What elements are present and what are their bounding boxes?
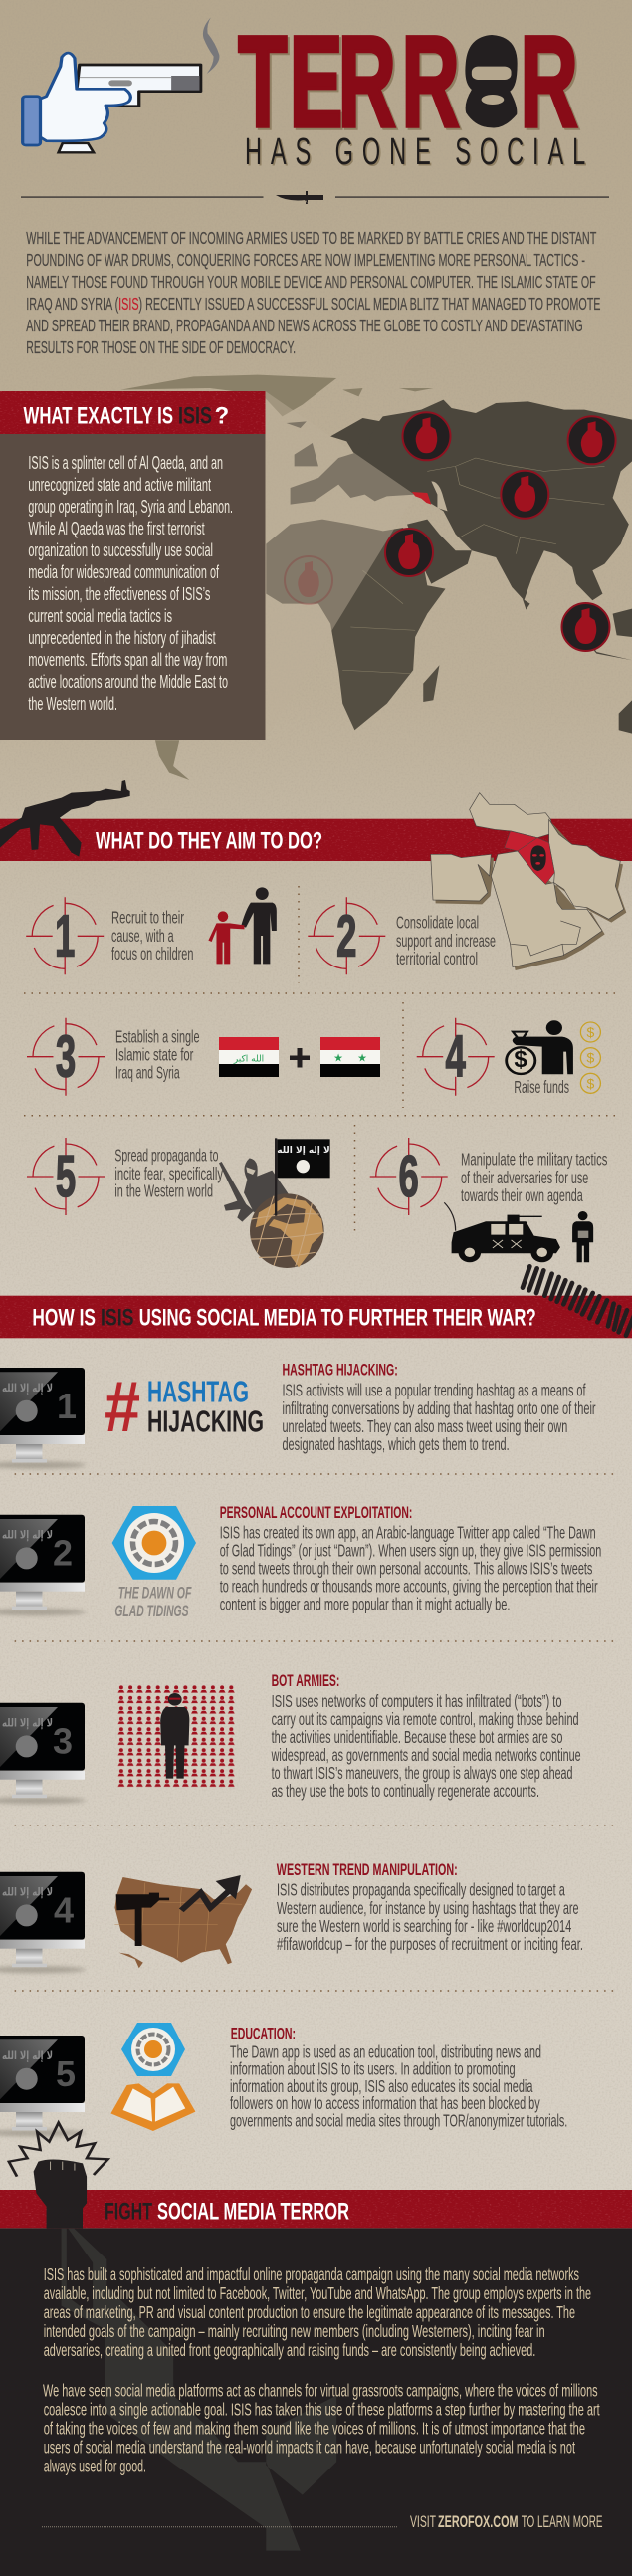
banner: SOCIAL MEDIA TERROR: [157, 2198, 349, 2225]
map: Middle East with Iraq and Syria highlighted: [431, 793, 626, 970]
body text: active locations around the Middle East to: [28, 672, 228, 692]
section: personal account exploitation: [220, 1504, 601, 1614]
coins: $: [587, 1075, 595, 1091]
text: Consolidate local: [396, 913, 479, 933]
grenade markers: [285, 412, 616, 651]
target number 6: [370, 1138, 448, 1215]
aim 3: establish state: [27, 1018, 380, 1096]
dotted divider: [15, 1640, 615, 1642]
target number 1: [26, 897, 104, 974]
ISIS territory marker: [412, 492, 431, 505]
text: [114, 1146, 223, 1201]
text: Recruit to their: [111, 908, 184, 928]
title: TERROR: TERRR: [238, 9, 578, 155]
body text: media for widespread communication of: [28, 562, 220, 582]
monitor 3: [0, 1703, 86, 1804]
heading bar: [0, 391, 265, 434]
section: western trend manipulation: WESTERN TREND MANIPULATION:: [277, 1861, 458, 1879]
target number 5: [27, 1138, 105, 1215]
target number 2: 2: [336, 905, 356, 969]
text: [115, 1027, 199, 1083]
dotted divider: [15, 1825, 615, 1826]
coins: $: [587, 1024, 595, 1040]
icon: Dawn app and open book: [110, 2023, 195, 2131]
banner: what do they aim to do: WHAT DO THEY AIM TO DO?: [96, 828, 322, 855]
flag: Syria: ★: [333, 1051, 343, 1065]
section: bot armies: [271, 1672, 581, 1801]
monitor 1: [0, 1368, 86, 1469]
footer call to action: [42, 2512, 603, 2531]
plus sign: [290, 1048, 310, 1067]
icon: armored vehicle and man: [444, 1202, 593, 1262]
text: Establish a single: [115, 1027, 199, 1047]
title: TERROR: TERRR: [240, 11, 580, 157]
text: support and increase: [396, 931, 496, 951]
header: title with gun hand: [23, 9, 587, 174]
flag: Syria: ★: [357, 1051, 367, 1065]
monitor 3: لا إله إلا الله: [2, 1717, 53, 1730]
body text: current social media tactics is: [28, 606, 172, 626]
body text: group operating in Iraq, Syria and Lebanon.: [28, 497, 233, 517]
caption: THE DAWN OF: [118, 1584, 192, 1603]
vertical dotted divider: [402, 1002, 404, 1108]
aim 2: consolidate: [308, 897, 496, 974]
icon: hashtag hijacking logo: [105, 1367, 264, 1447]
divider with knife: [21, 191, 609, 204]
flag: Iraq: [219, 1037, 279, 1077]
icon: raised fist with burst: [9, 2123, 108, 2228]
horizontal dotted divider: [24, 1115, 621, 1117]
heading bar: ?: [215, 403, 229, 430]
aim 4: raise funds: [417, 1018, 600, 1097]
text: [111, 908, 193, 964]
body text: movements. Efforts span all the way from: [28, 650, 227, 670]
target number 5: 5: [56, 1145, 76, 1209]
subtitle: HAS GONE SOCIAL: HAS GONE SOCIAL: [247, 131, 587, 174]
icon: fighter with flag on globe: [219, 1138, 330, 1268]
icon: smoke: [203, 17, 219, 74]
target number 2: [308, 897, 385, 974]
icon: man with money bag: [507, 1020, 573, 1074]
text: [461, 1150, 608, 1205]
vertical dotted divider: [354, 1125, 356, 1231]
text: focus on children: [111, 944, 193, 964]
banner: FIGHT: [105, 2198, 152, 2225]
monitor 1: 1: [57, 1386, 77, 1426]
text: Spread propaganda to: [114, 1146, 218, 1166]
monitor 5: 5: [56, 2053, 76, 2094]
section: hashtag hijacking: [283, 1362, 596, 1454]
target number 3: 3: [56, 1025, 76, 1090]
coins: $: [587, 1050, 595, 1066]
banner: how is ISIS using social media: ISIS: [101, 1305, 133, 1332]
flag: Syria: [320, 1037, 380, 1077]
monitor 3: 3: [53, 1721, 73, 1762]
monitor 2: لا إله إلا الله: [2, 1529, 53, 1542]
monitor 1: لا إله إلا الله: [2, 1382, 53, 1395]
section: education: [230, 2025, 567, 2130]
body text: the Western world.: [28, 694, 117, 714]
section: western trend manipulation: [277, 1861, 583, 1954]
aim 5: propaganda: [27, 1138, 330, 1268]
text: Raise funds: [514, 1077, 569, 1097]
aim 1: recruit: [26, 887, 277, 974]
dotted divider: [15, 1473, 615, 1475]
target number 3: [27, 1018, 105, 1096]
icon: like-hand pistol: [23, 53, 201, 152]
grenade marker: Arabia: [385, 529, 433, 576]
footer call to action: ZEROFOX.COM: [438, 2512, 518, 2531]
monitor 2: [0, 1515, 86, 1615]
target number 4: 4: [446, 1025, 466, 1090]
section: personal account exploitation: PERSONAL ACCOUNT EXPLOITATION:: [220, 1504, 412, 1522]
body text: ISIS is a splinter cell of Al Qaeda, and an: [28, 453, 223, 473]
icon: balaclava mask as letter O: [465, 35, 518, 127]
paragraph 1: [44, 2264, 591, 2360]
panel: what exactly is ISIS: [0, 391, 265, 740]
watermark: fox logo: [62, 2217, 336, 2551]
footer call to action: VISIT: [410, 2512, 436, 2531]
icon: US map with gun and trend arrow: [114, 1875, 252, 1968]
flag: Iraq: الله اكبر: [233, 1055, 264, 1065]
paragraph 2: always used for good.: [44, 2457, 146, 2476]
ammunition belt: [523, 1266, 632, 1336]
coins: [580, 1022, 600, 1093]
text: [396, 913, 496, 968]
target number 6: 6: [399, 1145, 419, 1209]
panel: fight social media terror: [0, 2123, 632, 2576]
banner: [0, 2190, 632, 2228]
monitor 5: [0, 2036, 86, 2136]
icon: adult and child: [208, 887, 277, 964]
icon: fighter with flag on globe: لا إله إلا الله: [277, 1146, 330, 1156]
aim 6: manipulate tactics: [370, 1138, 608, 1262]
text: incite fear, specifically: [114, 1164, 223, 1183]
banner: how is ISIS using social media: HOW IS: [32, 1305, 96, 1332]
grenade marker: West Africa faint: [285, 556, 332, 604]
body text: its mission, the effectiveness of ISIS’s: [28, 584, 210, 604]
text: in the Western world: [114, 1181, 213, 1201]
grenade marker: East Asia: [568, 416, 616, 464]
icon: bot army crowd with masked man: [117, 1685, 236, 1790]
body text: unrecognized state and active militant: [28, 475, 211, 495]
icon: AK-47 rifle: [0, 780, 130, 857]
monitor 4: 4: [54, 1890, 74, 1931]
monitor 4: [0, 1872, 86, 1973]
section: hashtag hijacking: HASHTAG HIJACKING:: [283, 1362, 398, 1380]
paragraph 2: [43, 2380, 600, 2476]
intro text: RESULTS FOR THOSE ON THE SIDE OF DEMOCRACY.: [26, 337, 296, 357]
icon: Dawn of Glad Tidings app: [112, 1506, 196, 1620]
banner: how is ISIS using social media: [0, 1296, 632, 1338]
body text: While Al Qaeda was the first terrorist: [28, 519, 205, 538]
subtitle: HAS GONE SOCIAL: HAS GONE SOCIAL: [245, 129, 585, 172]
icon: mini balaclava: [530, 845, 546, 871]
grenade marker: South-East Asia: [561, 603, 609, 651]
icon: hashtag hijacking logo: #: [105, 1367, 140, 1447]
body text: unprecedented in the history of jihadist: [28, 628, 216, 648]
icon: hashtag hijacking logo: HASHTAG: [147, 1374, 249, 1408]
grenade marker: Russia: [402, 412, 450, 460]
section: bot armies: BOT ARMIES:: [272, 1672, 339, 1690]
world map: [121, 375, 632, 780]
body text: [28, 453, 233, 714]
monitor 4: لا إله إلا الله: [2, 1886, 53, 1899]
icon: man with money bag: $: [514, 1046, 527, 1073]
grenade marker: Central Asia: [501, 471, 548, 519]
dotted divider: [15, 1990, 615, 1992]
horizontal dotted divider: [24, 992, 621, 994]
target number 4: [417, 1018, 495, 1096]
text: cause, with a: [111, 926, 174, 946]
intro text: [26, 228, 601, 357]
text: territorial control: [396, 949, 478, 968]
heading bar: WHAT EXACTLY IS: [24, 403, 173, 430]
caption: GLAD TIDINGS: [114, 1602, 189, 1620]
banner: what do they aim to do: [0, 819, 632, 861]
vertical dotted divider: [298, 886, 300, 983]
translucent spotlight cone: [265, 391, 415, 740]
monitor 5: لا إله إلا الله: [2, 2049, 53, 2062]
text: Islamic state for: [115, 1045, 194, 1065]
text: Iraq and Syria: [115, 1063, 180, 1083]
icon: hashtag hijacking logo: HIJACKING: [147, 1403, 264, 1438]
monitor 2: 2: [53, 1533, 73, 1574]
heading bar: ISIS: [178, 403, 212, 430]
target number 1: 1: [55, 905, 75, 969]
body text: organization to successfully use social: [28, 540, 213, 560]
section: education: EDUCATION:: [231, 2025, 296, 2042]
caption: [114, 1584, 192, 1620]
